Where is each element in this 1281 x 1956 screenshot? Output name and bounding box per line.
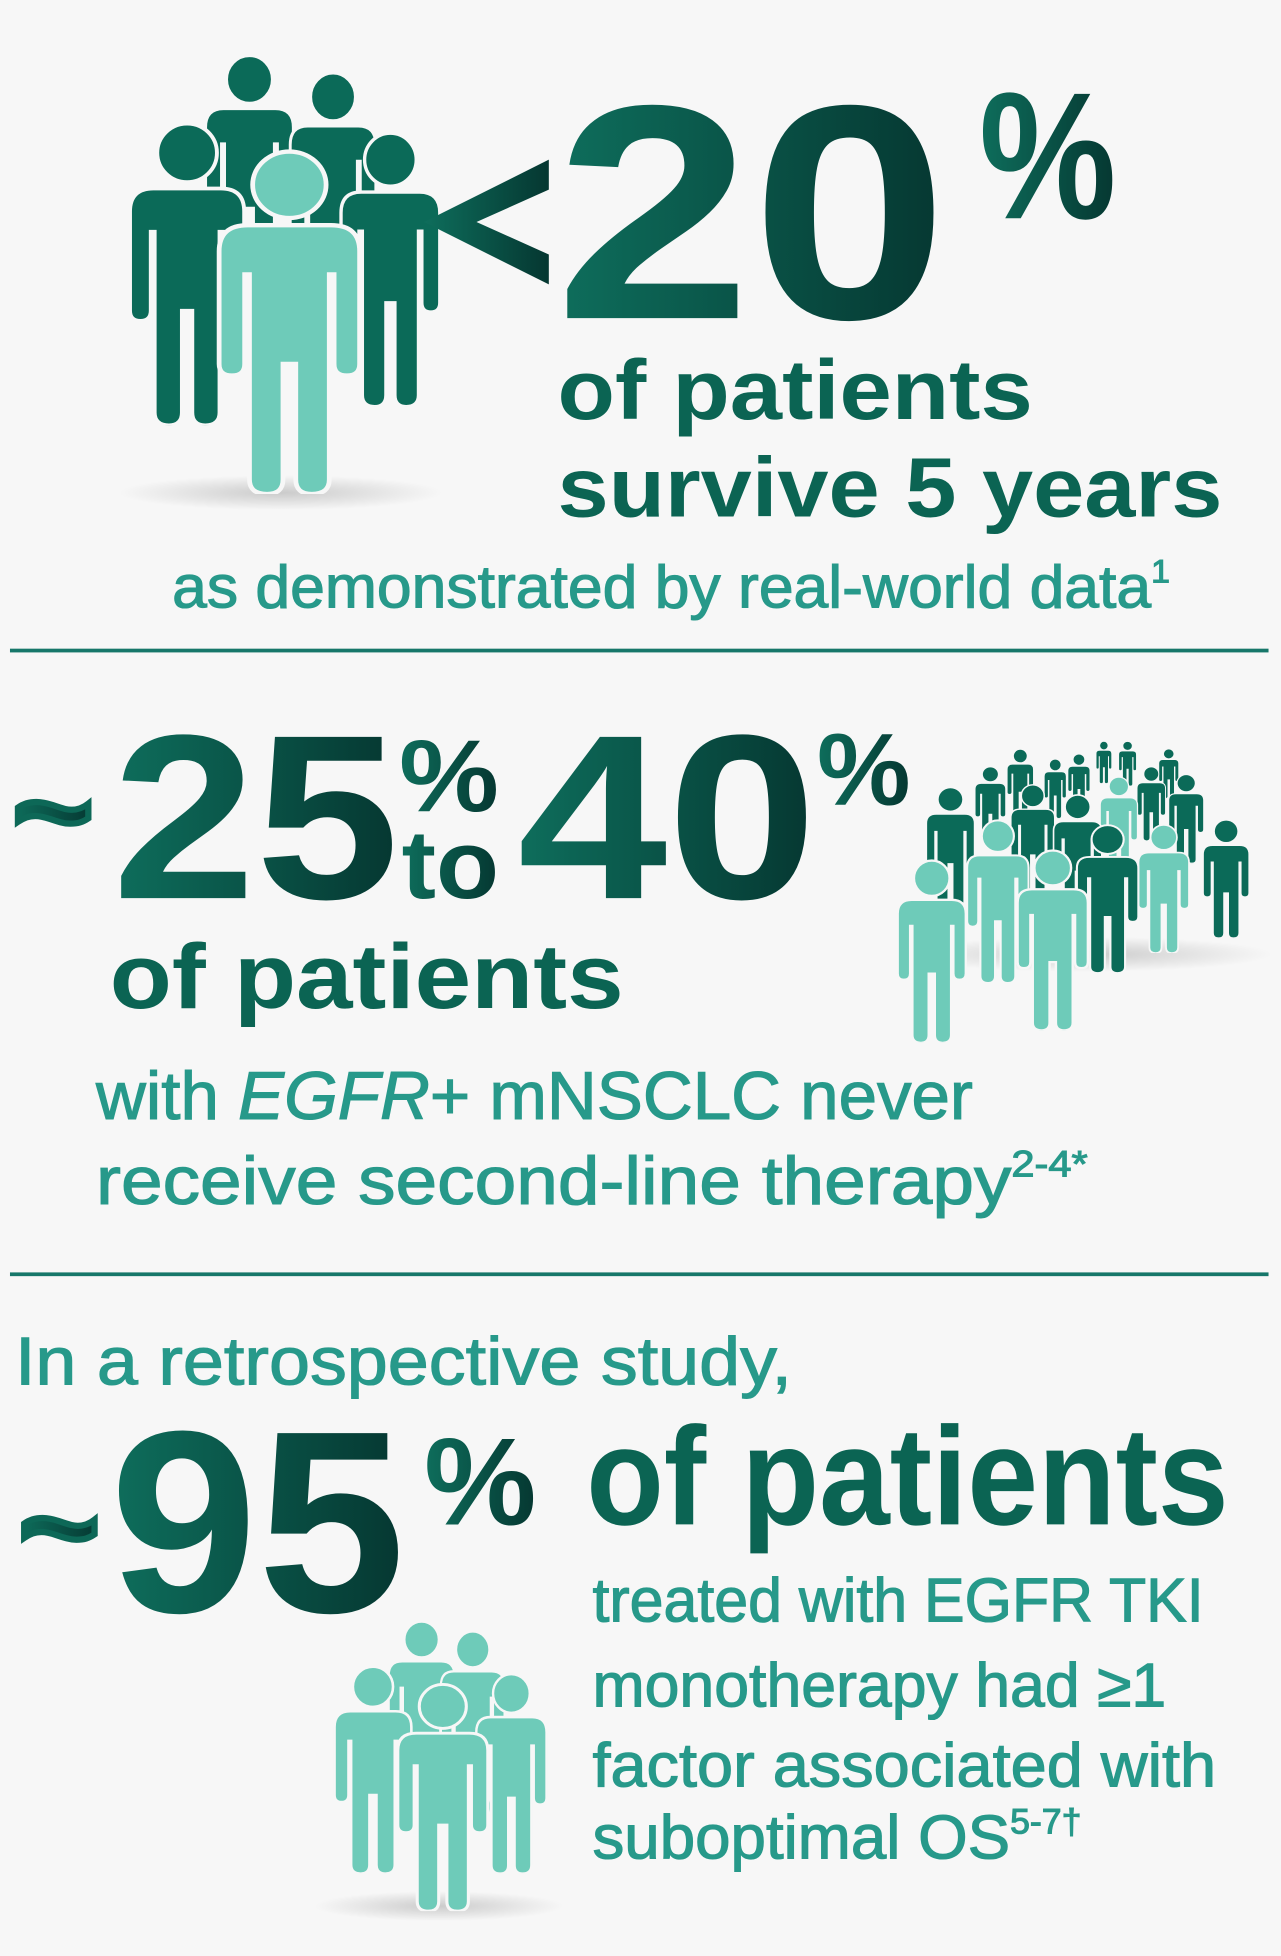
- headline ~25% to 40%: %: [817, 712, 911, 827]
- headline ~25% to 40%: %: [399, 718, 499, 833]
- headline <20%: 20: [555, 41, 948, 383]
- subtext: real-world data: as demonstrated by real-world data: [172, 554, 1110, 621]
- headline ~25% to 40%: ~: [12, 735, 94, 888]
- section 1 people icon group: [118, 56, 443, 510]
- text: of patients (section 3): of patients: [586, 1398, 1229, 1554]
- headline ~25% to 40%: 25: [112, 686, 399, 948]
- subtext: EGFR+ mNSCLC: 2-4*: [1011, 1142, 1088, 1184]
- headline ~25% to 40%: 40: [518, 686, 817, 948]
- subtext: EGFR+ mNSCLC: receive second-line therapy: [96, 1144, 920, 1219]
- subtext: EGFR TKI monotherapy: monotherapy had ≥1: [592, 1652, 1166, 1721]
- headline ~25% to 40%: to: [402, 810, 499, 919]
- crowd icon: [898, 742, 1272, 1043]
- subtext: real-world data: 1: [1151, 554, 1170, 590]
- text: In a retrospective study: In a retrospective study,: [15, 1325, 792, 1400]
- headline ~95%: [19, 1377, 536, 1667]
- subtext: EGFR TKI monotherapy: [592, 1567, 1216, 1873]
- subtext: EGFR TKI monotherapy: suboptimal OS: [592, 1804, 1001, 1873]
- text: of patients survive 5 years: [558, 342, 1222, 534]
- text: of patients (section 2): of patients: [110, 924, 624, 1028]
- headline ~25% to 40%: [12, 686, 911, 948]
- section 3 people icon: [314, 1622, 564, 1921]
- text: of patients survive 5 years: of patients: [558, 342, 1033, 437]
- headline ~95%: 95: [110, 1377, 405, 1667]
- subtext: EGFR+ mNSCLC: [95, 1059, 1088, 1219]
- subtext: EGFR TKI monotherapy: 5-7†: [1010, 1803, 1081, 1842]
- headline <20%: [424, 41, 1116, 383]
- subtext: EGFR+ mNSCLC: with EGFR+ mNSCLC never: [95, 1059, 973, 1134]
- text: of patients survive 5 years: survive 5 years: [558, 439, 1222, 534]
- subtext: EGFR TKI monotherapy: treated with EGFR TKI: [592, 1567, 1204, 1636]
- headline ~95%: ~: [19, 1451, 100, 1604]
- subtext: EGFR TKI monotherapy: factor associated with: [592, 1731, 1216, 1800]
- headline ~95%: %: [424, 1412, 536, 1551]
- headline <20%: %: [979, 55, 1116, 257]
